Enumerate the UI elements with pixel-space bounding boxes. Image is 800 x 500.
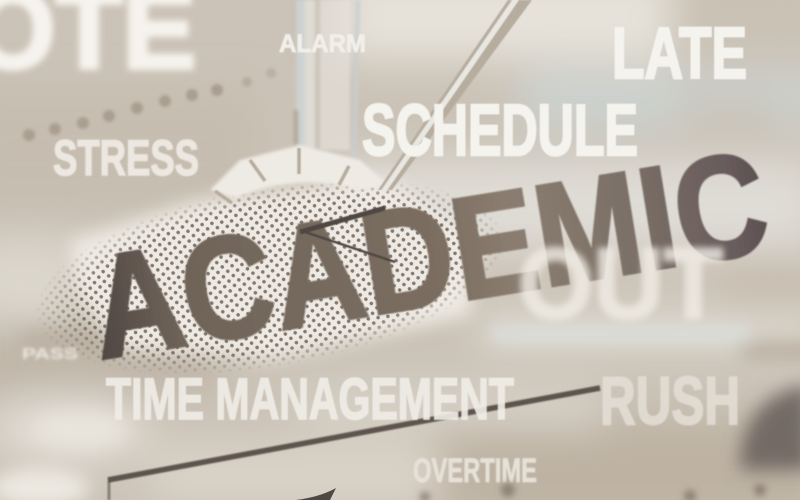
- word: STRESS: STRESS: [53, 130, 199, 186]
- blurred word: OUT: OUT: [518, 228, 723, 340]
- clock glass streaks: [296, 0, 358, 160]
- word: LATE: LATE: [612, 14, 747, 94]
- bottom blurred fragments: [420, 483, 766, 500]
- bottom frame line: [108, 388, 600, 500]
- word: OVERTIME: OVERTIME: [413, 452, 537, 490]
- blurred dotted arc: [23, 68, 276, 141]
- blurred word: PASS: PASS: [22, 346, 78, 363]
- halftone panel: [38, 178, 499, 372]
- clock face ticks: [210, 145, 388, 203]
- word: ALARM: ALARM: [279, 30, 366, 58]
- word: TIME MANAGEMENT: TIME MANAGEMENT: [106, 367, 514, 432]
- word: RUSH: RUSH: [600, 363, 740, 439]
- word: SCHEDULE: SCHEDULE: [362, 91, 638, 171]
- bottom dark fragment: [296, 488, 336, 500]
- clock hands across headline: [300, 208, 395, 262]
- clock minute hand: [378, 0, 532, 192]
